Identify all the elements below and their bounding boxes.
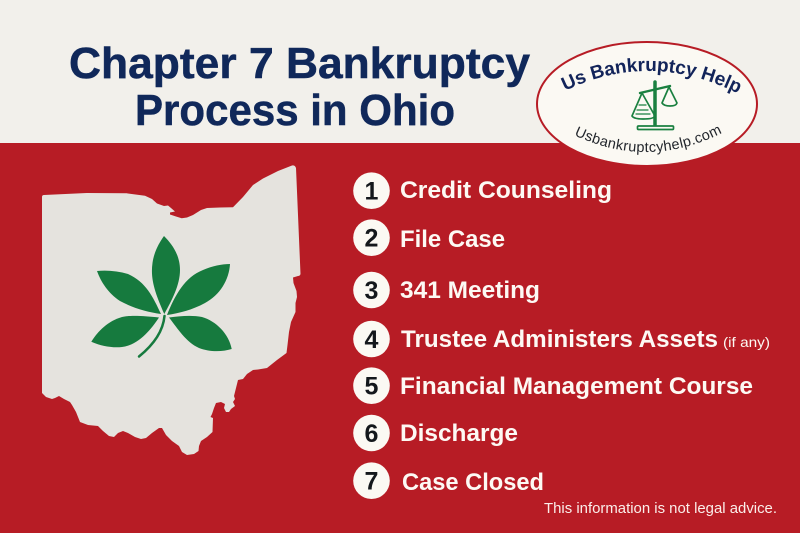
step 7: 7	[365, 468, 378, 496]
step 2: 2	[365, 224, 378, 252]
icon: buckeye leaf	[91, 236, 232, 356]
step 6	[353, 415, 518, 451]
panel: cream header background	[0, 0, 800, 143]
logo name curved text: Us Bankruptcy Help	[560, 58, 740, 94]
step 4: 4	[365, 326, 379, 354]
step 7	[353, 462, 544, 499]
logo badge	[536, 41, 758, 165]
step 1	[353, 172, 612, 209]
step 3	[353, 272, 540, 308]
step 3: 3	[365, 277, 378, 305]
step 1: Credit Counseling	[400, 177, 612, 204]
step 6: Discharge	[400, 420, 518, 447]
logo url curved text: Usbankruptcyhelp.com	[576, 126, 722, 155]
step 5: 5	[365, 372, 379, 400]
disclaimer: This information is not legal advice.	[544, 500, 777, 517]
title: Chapter 7 Bankruptcy	[69, 39, 531, 88]
panel: red background	[0, 143, 800, 533]
step 4: (if any)	[723, 334, 770, 350]
step 1: 1	[365, 178, 379, 206]
step 2: File Case	[400, 226, 505, 253]
step 3: 341 Meeting	[400, 277, 540, 304]
step 5: Financial Management Course	[400, 373, 753, 400]
title: Process in Ohio	[135, 86, 455, 135]
step 6: 6	[365, 420, 378, 448]
step 7: Case Closed	[402, 469, 544, 496]
icon: scales of justice	[632, 82, 677, 130]
map: Ohio silhouette	[42, 165, 300, 455]
step 2	[353, 219, 505, 256]
step 4: Trustee Administers Assets	[401, 326, 718, 353]
title	[69, 39, 531, 135]
step 4	[353, 321, 770, 357]
step 5	[353, 367, 753, 404]
